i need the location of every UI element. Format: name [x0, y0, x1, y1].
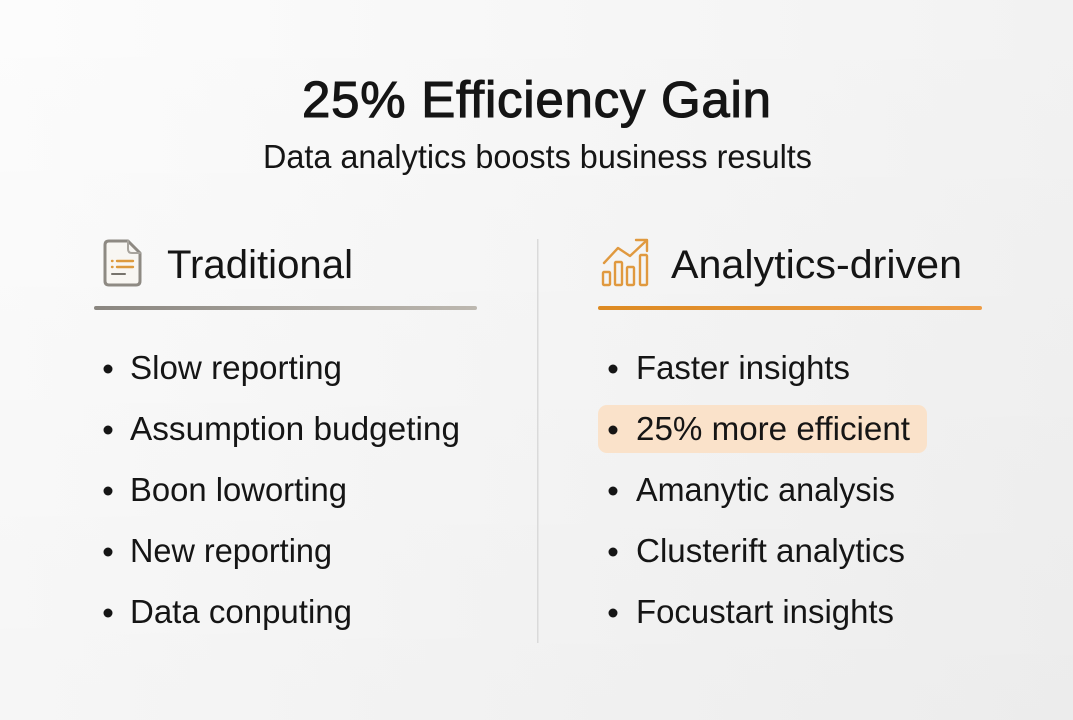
- list: analytics items: [608, 349, 910, 630]
- heading rule: [598, 306, 982, 310]
- list: traditional items: Data conputing: [130, 593, 352, 630]
- icon: rising bar chart: [603, 240, 647, 285]
- list: traditional items: Assumption budgeting: [130, 410, 460, 447]
- subtitle: Data analytics boosts business results: [263, 138, 812, 175]
- panel: analytics-driven: [598, 240, 982, 630]
- heading: Traditional: Traditional: [167, 243, 353, 287]
- icon: document: [105, 241, 140, 285]
- heading rule: [94, 306, 477, 310]
- list: traditional items: New reporting: [130, 532, 332, 569]
- highlight: 25% more efficient: [598, 405, 927, 453]
- list: analytics items: Clusterift analytics: [636, 532, 905, 569]
- list: analytics items: Amanytic analysis: [636, 471, 895, 508]
- list: traditional items: Slow reporting: [130, 349, 342, 386]
- panel: traditional: [94, 241, 477, 630]
- list: analytics items: 25% more efficient: [636, 410, 910, 447]
- list: analytics items: Focustart insights: [636, 593, 894, 630]
- list: analytics items: Faster insights: [636, 349, 850, 386]
- list: traditional items: [104, 349, 460, 630]
- list: traditional items: Boon loworting: [130, 471, 347, 508]
- title: 25% Efficiency Gain: [302, 71, 771, 128]
- heading: Analytics-driven: Analytics-driven: [671, 243, 962, 287]
